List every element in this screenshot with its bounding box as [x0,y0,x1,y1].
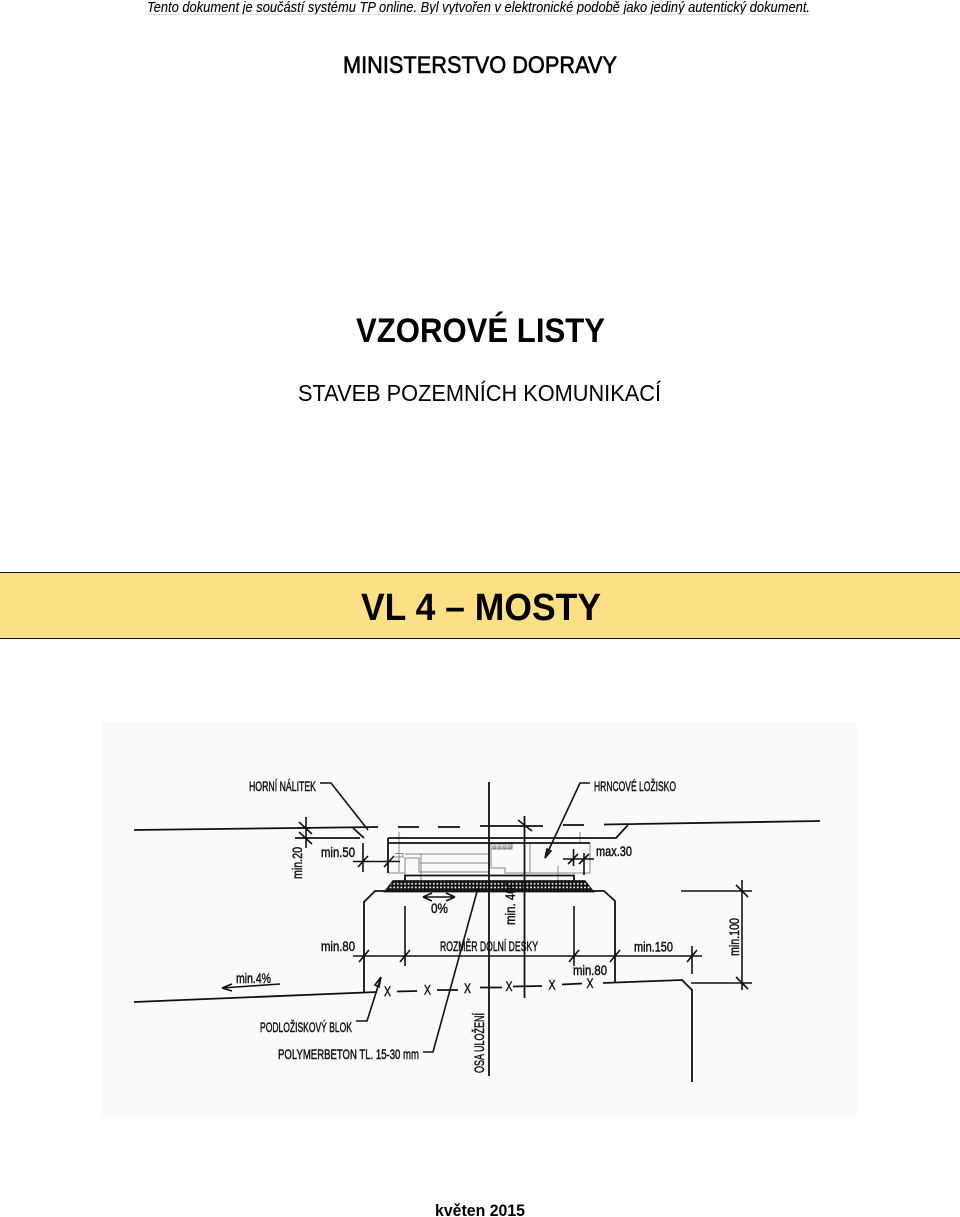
header notice: Tento dokument je součástí systému TP online. Byl vytvořen v elektronické podobě jako jediný autentický dokument. [147,0,810,16]
dimension: min.400 [503,820,532,925]
slope: 0%: 0% [431,901,448,916]
levelling line of x marks: X [384,984,391,999]
callout: hrncové ložisko [545,779,676,858]
callout: hrncové ložisko: HRNCOVÉ LOŽISKO [594,779,676,794]
dimension: max.30 [563,844,632,875]
dimension: max.30: max.30 [596,844,632,859]
dimension chain: lower plate size: ROZMĚR DOLNÍ DESKY [440,939,538,954]
title: vzorové listy: VZOROVÉ LISTY [356,310,605,350]
bearing block and abutment [134,891,692,1082]
dimension chain: lower plate size: min.150 [634,940,673,954]
dimension chain: lower plate size: min.80 [573,963,607,978]
bridge deck and ledge outline [134,821,820,873]
dimension: min.100 [681,880,752,990]
dimension: min.20 [290,817,312,879]
levelling line of x marks: X [506,979,512,994]
dimension: min.400: min. 400 [503,881,518,925]
levelling line of x marks: X [548,978,556,992]
levelling line of x marks: X [424,982,431,998]
levelling line of x marks: X [586,976,594,991]
lower bearing plate [405,876,574,881]
slope: 0% [423,893,455,916]
dimension: min.100: min.100 [727,918,742,956]
callout: horní nálitek [249,779,368,830]
slope arrow: min.4% [222,971,280,991]
callout: polymerbeton: POLYMERBETON TL. 15-30 mm [278,1047,419,1062]
dimension chain: lower plate size: min.80 [321,939,355,954]
subtitle: STAVEB POZEMNÍCH KOMUNIKACÍ [298,380,661,406]
callout: polymerbeton [278,888,478,1062]
technical drawing: bridge bearing detail [102,722,857,1117]
levelling line of x marks [384,976,594,999]
banner: VL 4 mosty: VL 4 – MOSTY [361,587,601,629]
axis label: osa uložení: OSA ULOŽENÍ [472,1013,487,1073]
dimension: min.20: min.20 [290,847,305,879]
heading: ministry: MINISTERSTVO DOPRAVY [343,52,617,79]
dimension: min.50 [321,843,400,872]
levelling line of x marks: X [464,981,471,996]
centre axes [489,782,524,1076]
slope arrow: min.4%: min.4% [236,971,271,986]
bearing internal details [388,832,590,893]
dimension: min.50: min.50 [321,845,355,860]
callout: podložiskový blok: PODLOŽISKOVÝ BLOK [260,1020,352,1035]
dimension chain: lower plate size [321,906,702,978]
polymer concrete layer [384,880,594,892]
callout: podložiskový blok [260,977,381,1035]
callout: horní nálitek: HORNÍ NÁLITEK [249,779,316,794]
banner: VL 4 mosty [0,572,960,638]
